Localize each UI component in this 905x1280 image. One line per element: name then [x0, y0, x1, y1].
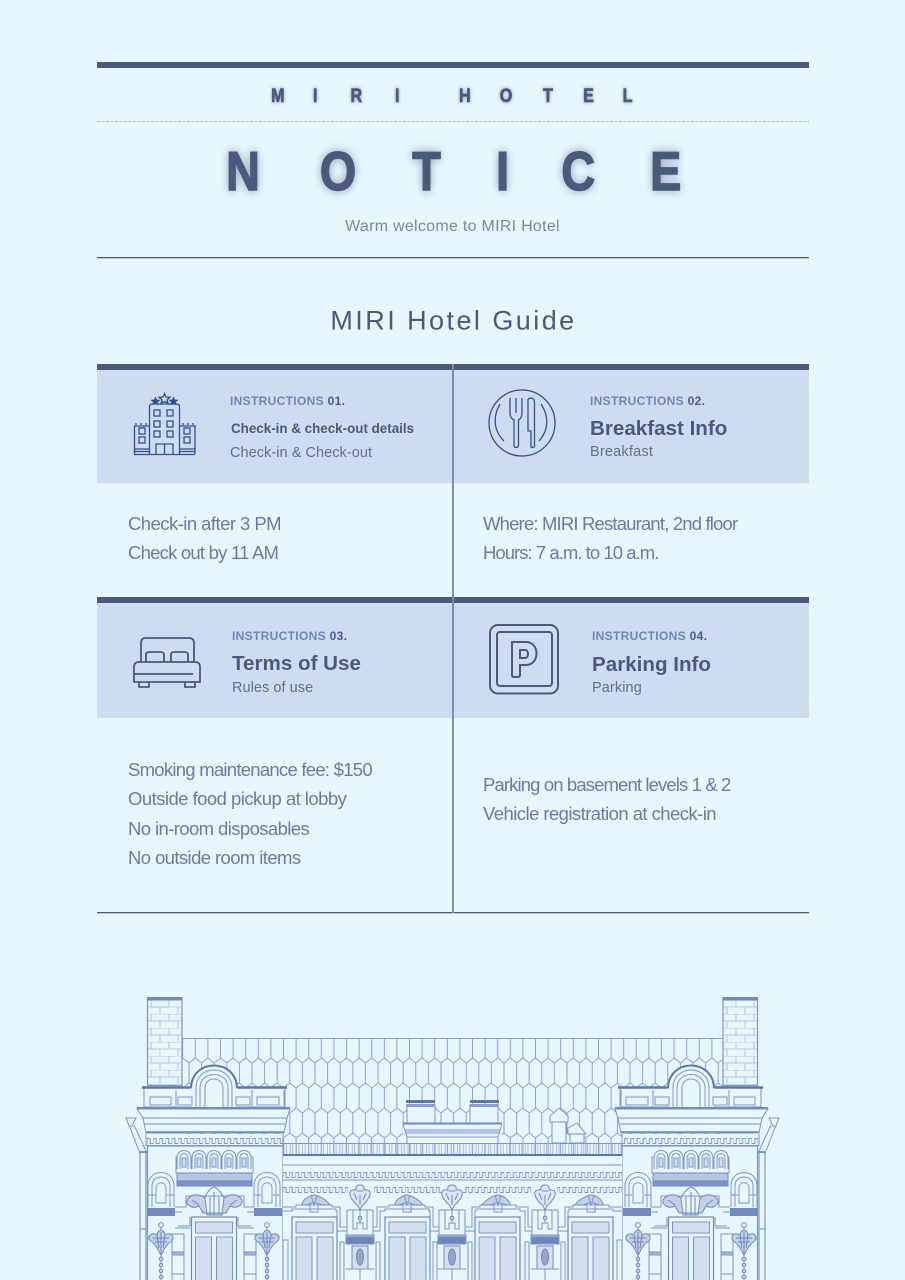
label: INSTRUCTIONS 02. — [590, 394, 705, 408]
icon: parking sign — [490, 625, 558, 694]
icon: bed — [134, 638, 200, 687]
hotel name: MIRIHOTEL — [271, 85, 633, 106]
NOTICE heading: NOTICE — [226, 140, 681, 202]
icon: hotel — [134, 394, 195, 454]
label: INSTRUCTIONS 03. — [232, 629, 347, 643]
body: Parking on basement levels 1 & 2 — [483, 774, 731, 795]
illustration: hotel building — [126, 997, 779, 1280]
header rule — [97, 257, 809, 258]
subheading: Breakfast — [590, 444, 653, 460]
body: Hours: 7 a.m. to 10 a.m. — [483, 542, 658, 563]
guide title: MIRI Hotel Guide — [330, 306, 577, 336]
body: Where: MIRI Restaurant, 2nd floor — [483, 513, 738, 534]
heading: Check-in & check-out details — [231, 421, 414, 436]
body: Smoking maintenance fee: $150 — [128, 759, 372, 780]
body: Vehicle registration at check-in — [483, 803, 716, 824]
body: Check-in after 3 PM — [128, 513, 281, 534]
subheading: Parking — [592, 680, 642, 696]
header block — [97, 62, 809, 258]
welcome line: Warm welcome to MIRI Hotel — [345, 218, 560, 235]
guide table — [97, 364, 809, 913]
table rules — [97, 364, 809, 913]
panel: terms — [128, 629, 372, 868]
roof tiles — [182, 1038, 723, 1155]
building left half — [126, 997, 467, 1280]
panel: breakfast — [483, 390, 738, 563]
heading: Parking Info — [592, 653, 711, 676]
building right half — [438, 997, 779, 1280]
label: INSTRUCTIONS 01. — [230, 394, 345, 408]
icon: plate with fork and knife — [489, 390, 555, 456]
body: No outside room items — [128, 847, 301, 868]
top rule — [97, 62, 809, 68]
label: INSTRUCTIONS 04. — [592, 629, 707, 643]
body: Check out by 11 AM — [128, 542, 278, 563]
panel: check-in — [128, 394, 414, 563]
subheading: Check-in & Check-out — [230, 445, 372, 461]
heading: Breakfast Info — [590, 417, 727, 440]
panel: parking — [483, 625, 731, 824]
heading: Terms of Use — [232, 652, 361, 675]
small roof finials — [550, 1108, 586, 1143]
subheading: Rules of use — [232, 680, 313, 696]
dashed divider — [97, 120, 809, 122]
header bands — [97, 370, 809, 718]
body: No in-room disposables — [128, 818, 309, 839]
body: Outside food pickup at lobby — [128, 788, 348, 809]
